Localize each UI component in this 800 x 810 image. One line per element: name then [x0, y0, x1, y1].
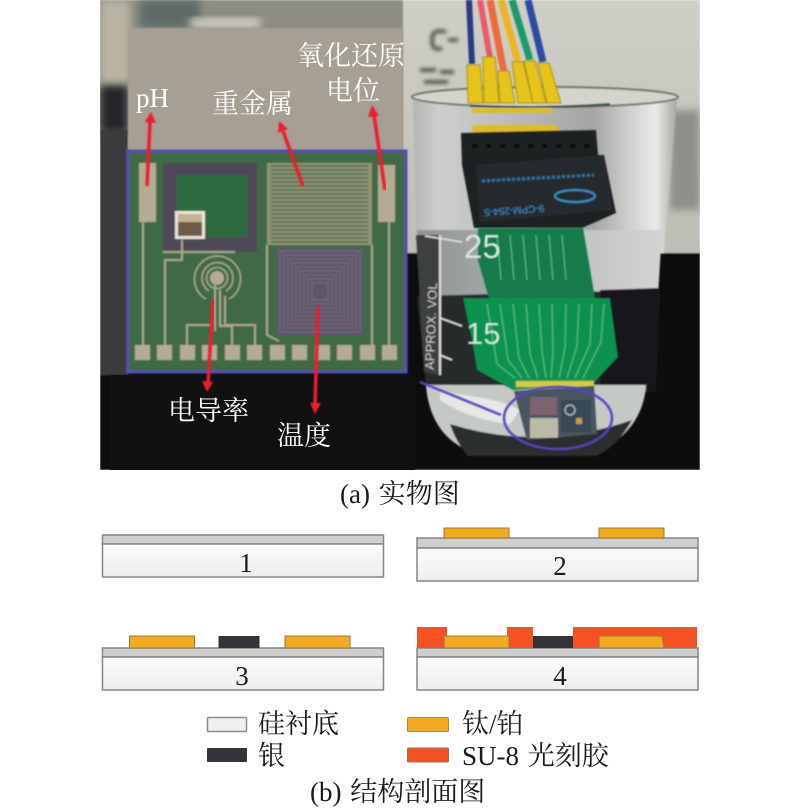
label: pH: pH [136, 83, 169, 113]
cross-section step 2: 2 [553, 551, 567, 581]
temperature spiral [267, 245, 372, 345]
green flexible circuit [463, 228, 618, 390]
arrow: redox potential [368, 105, 385, 190]
purple callout ellipse and leader line [420, 382, 612, 449]
black label panel [110, 375, 415, 470]
arrow: pH [145, 112, 156, 186]
grey label panel [128, 28, 403, 151]
legend: silicon substrate: 硅衬底 [258, 709, 339, 739]
yellow crimp connectors [467, 57, 563, 136]
sensor chip close-up [128, 151, 406, 372]
contact pads [135, 345, 397, 360]
label: redox potential: 氧化还原 [297, 41, 405, 71]
beaker volume marks: APPROX. VOL [422, 282, 440, 370]
black plug connector: 9-CPM-254-5 [483, 202, 545, 217]
legend: silicon substrate [208, 709, 339, 739]
beaker volume marks: 15 [466, 316, 500, 351]
legend: silver: 银 [258, 741, 285, 771]
trace wiring [163, 240, 235, 345]
black plug connector [461, 130, 616, 228]
legend [207, 709, 610, 771]
redox electrode [378, 165, 395, 345]
label: redox potential: 电位 [326, 76, 380, 106]
reference electrode image [175, 211, 205, 239]
arrow: temperature [310, 307, 321, 414]
photo panel: sensor chip and beaker [100, 0, 700, 470]
coloured wires [469, 0, 543, 72]
beaker volume marks [422, 228, 501, 370]
photo background [100, 0, 700, 470]
cross-section step 3 [102, 636, 384, 691]
legend: SU-8 photoresist: SU-8 光刻胶 [462, 741, 610, 771]
legend: silver [207, 741, 285, 771]
label: conductivity: 电导率 [168, 396, 249, 426]
cross-section step 1 [102, 535, 384, 578]
heavy metal comb electrode [267, 163, 372, 245]
caption (a): (a) 实物图 [340, 479, 460, 509]
cross-section step 3: 3 [235, 661, 249, 691]
legend: titanium/platinum [408, 709, 524, 739]
label: temperature: 温度 [277, 421, 331, 451]
beaker volume marks: 25 [464, 228, 501, 265]
cross-section step 4: 4 [553, 661, 567, 691]
cross-section step 1: 1 [239, 548, 253, 578]
cross-section step 2 [417, 528, 698, 581]
dark reference area [163, 163, 257, 252]
cross-section step 4 [417, 627, 698, 691]
arrow: heavy metal [278, 121, 303, 186]
conductivity ring electrode [187, 256, 255, 345]
arrow: conductivity [202, 300, 213, 392]
submerged sensor chip [514, 386, 597, 440]
label: heavy metal: 重金属 [212, 89, 293, 119]
legend: titanium/platinum: 钛/铂 [462, 709, 524, 739]
label: redox potential [297, 41, 405, 106]
caption (b): (b) 结构剖面图 [310, 777, 485, 807]
beaker with water [412, 87, 678, 456]
pH electrode [139, 163, 156, 345]
